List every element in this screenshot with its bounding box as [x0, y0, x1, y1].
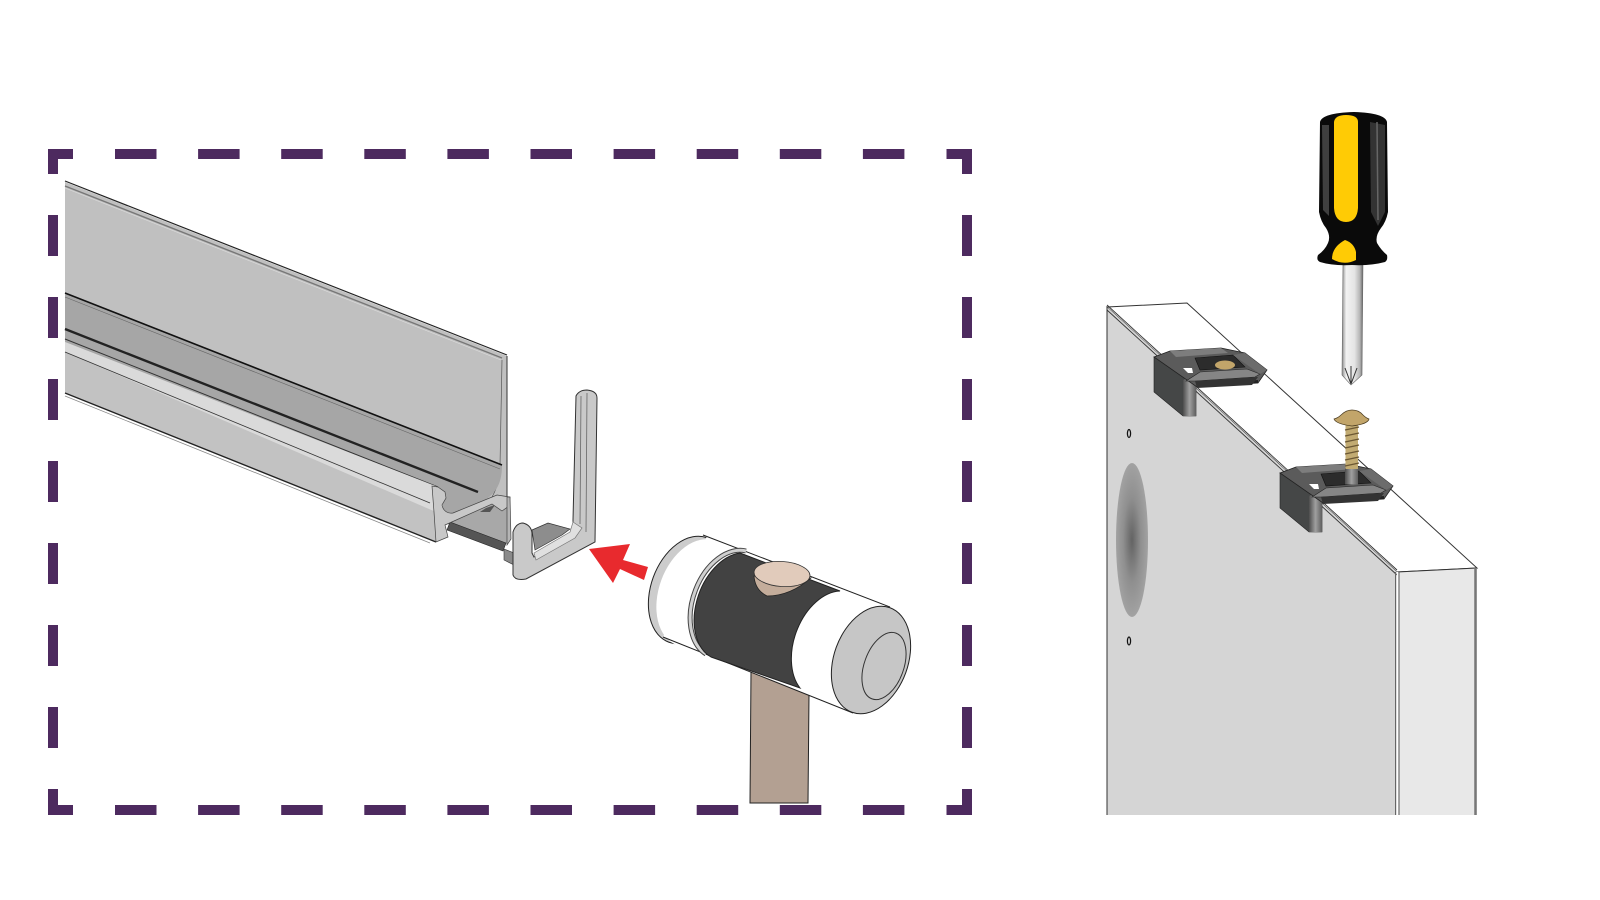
handle [750, 672, 809, 803]
yellow stripe [1334, 115, 1358, 222]
screwdriver [1317, 112, 1388, 385]
profile end face [432, 486, 510, 542]
left cap [634, 525, 742, 655]
mallet head body [663, 536, 890, 713]
red arrow [589, 544, 648, 583]
panel clip 2 [1280, 464, 1393, 532]
gutter band [65, 293, 502, 515]
upright plate [65, 182, 507, 500]
aluminium profile rail [65, 181, 511, 551]
rubber band [690, 550, 746, 654]
door panel [1107, 303, 1477, 815]
striking face [817, 595, 925, 725]
large hole [1116, 463, 1148, 617]
knob [754, 576, 811, 596]
dashed frame [48, 149, 972, 815]
panel clip 1 [1154, 348, 1267, 416]
handle [1317, 112, 1388, 265]
lower lip [65, 342, 436, 542]
lower channel opening [448, 503, 510, 545]
screw [1334, 410, 1369, 484]
small holes [1127, 430, 1131, 438]
end clip bracket [504, 390, 597, 580]
shaft [1342, 262, 1363, 385]
mallet [634, 525, 925, 803]
tip [1345, 366, 1357, 384]
